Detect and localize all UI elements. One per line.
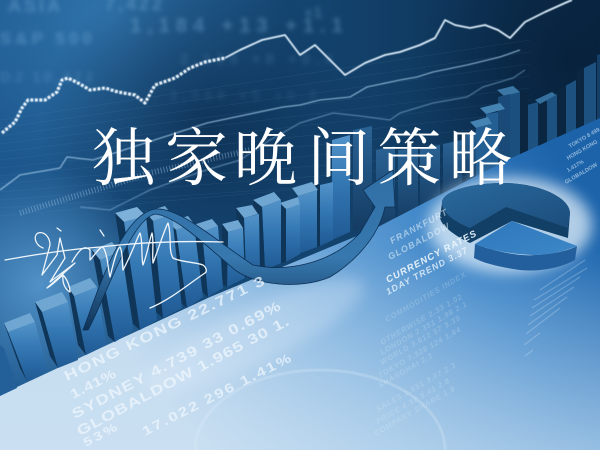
ticker text on the floor, upper right: GLOBALDOW xyxy=(564,162,599,186)
line chart: third index line xyxy=(80,70,525,210)
pie: wedge side xyxy=(474,244,577,271)
pie: main body top xyxy=(442,183,570,228)
ticker text on the floor, left block: 53% xyxy=(81,420,119,449)
ticker text on the floor, centre block: PRICE 4.92 3.41 2.8 xyxy=(374,376,452,426)
ticker text on the floor, left block: 17.022 296 1.41% xyxy=(140,351,294,439)
volume ticks on the screen xyxy=(20,150,250,213)
title: 独家晚间策略 xyxy=(92,108,512,199)
line chart: second index line xyxy=(0,50,520,190)
ticker text on the floor, upper right xyxy=(564,127,600,186)
blurred ticker text on the screen: S&P 500 xyxy=(0,29,96,48)
bars: back row along the horizon xyxy=(376,54,600,235)
ticker text on the floor, upper right: HONG KONG xyxy=(566,139,599,162)
ticker text on the floor, upper right: 1.417% xyxy=(566,159,585,174)
blurred ticker text on the screen: 1,184 +13 +1.1 xyxy=(130,15,349,37)
ticker text on the floor, centre block: FRANKFURT xyxy=(388,207,450,246)
blurred ticker text on the screen: 2,135 +8 +0.4 xyxy=(180,51,338,68)
ticker text on the floor, left block: SYDNEY 4.739 33 0.69% xyxy=(69,298,283,422)
ticker text on the floor, left block xyxy=(62,273,294,449)
ticker text on the floor, centre block: OTHERWISE 2.33 1.02 xyxy=(378,292,464,347)
pie chart: 3D pie with detached wedge xyxy=(428,177,592,273)
blurred ticker text on the screen: DJ 10,422 xyxy=(0,69,96,86)
pie: wedge top xyxy=(475,221,577,255)
line chart: bright index line, right part xyxy=(225,0,572,75)
ticker text on the floor, centre block: SALES 1.551 3.07 2.3 xyxy=(374,360,458,414)
ticker text on the floor, centre block: COMMODITIES INDEX xyxy=(384,270,468,324)
blurred ticker text on the screen: +1 xyxy=(304,5,322,22)
bar chart: tall middle bars behind the arrow xyxy=(0,126,372,396)
ticker text on the floor, centre block: SHANGHAI 2.1 xyxy=(376,351,435,390)
ticker text on the floor, centre block: GLOBALDOW xyxy=(386,220,452,262)
arrow: rising blue trend arrow xyxy=(83,170,395,330)
ticker text on the floor, right stripes xyxy=(524,260,587,356)
blurred ticker text on the screen xyxy=(0,0,349,103)
ticker text on the floor, centre block: 1DAY TREND 3.37 xyxy=(384,245,470,297)
ticker text on the floor, centre block xyxy=(372,207,479,438)
ticker text on the floor, centre block: CURRENCY RATES xyxy=(384,228,479,286)
ticker text on the floor, centre block: COMPANY SHARE 1.9 xyxy=(372,384,457,438)
floor: light blue reflective surface xyxy=(0,118,600,450)
grid lines on the screen xyxy=(0,40,530,216)
blurred ticker text on the screen: 1,066 +5 +0.3 xyxy=(170,87,321,103)
ticker text on the floor, centre block: WORLD 3.612 57 3.39 xyxy=(378,313,462,367)
pie: main body side xyxy=(440,183,570,243)
ticker text on the floor, left block: 1.41% xyxy=(68,367,119,402)
ticker text on the floor, left block: GLOBALDOW 1.965 30 1. xyxy=(74,314,292,439)
line chart: bright index line, left part xyxy=(2,58,225,133)
ticker text on the floor, centre block: TOKYO 7.328 124 1.84 xyxy=(376,325,463,380)
signature: white handwritten scribble xyxy=(5,223,223,308)
ticker text on the floor, left block: HONG KONG 22.771 3 xyxy=(62,273,267,384)
ticker text on the floor, centre block: LONDON 2.351 1.98 2.1 xyxy=(378,299,469,357)
